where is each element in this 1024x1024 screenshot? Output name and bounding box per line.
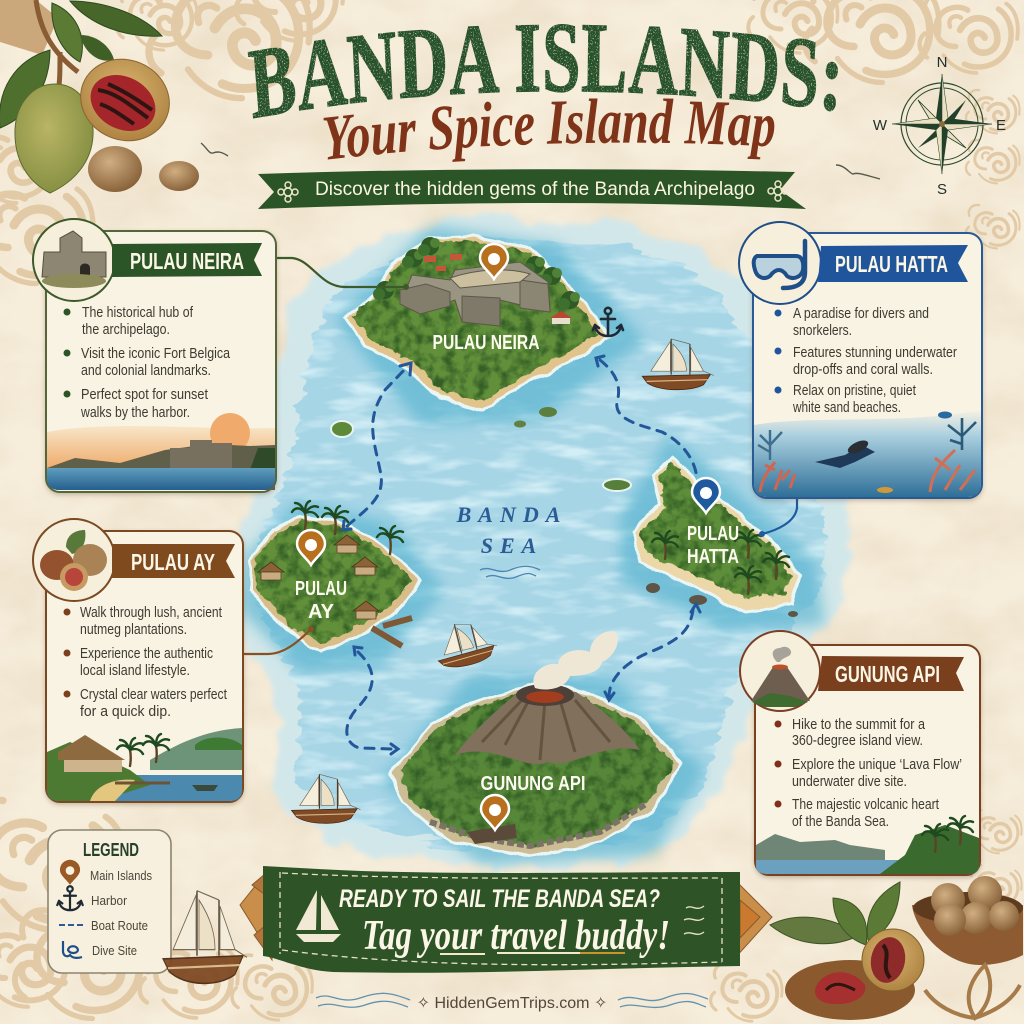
panel scene: mountains and jungle (756, 816, 979, 874)
panel bullets: Hike to the summit for a (792, 717, 926, 733)
panel bullets: walks by the harbor. (80, 405, 190, 421)
pin: Hatta (692, 478, 720, 513)
illustration: nutmeg branch top-left (0, 0, 199, 193)
map label: Banda Sea (456, 502, 567, 578)
decorative sailing ships on the sea (292, 339, 714, 823)
panel bullets (774, 306, 957, 416)
footer website (316, 993, 708, 1012)
map labels: island names: PULAU (295, 578, 347, 600)
panel bullets: local island lifestyle. (80, 663, 190, 679)
map labels: island names: HATTA (687, 546, 739, 568)
compass rose: W (873, 117, 888, 134)
connector lines from panels to islands (243, 258, 797, 654)
panel icon: dive mask and snorkel (739, 222, 821, 304)
panel scene: sunset fort (47, 413, 275, 490)
decorative seagulls (201, 143, 880, 179)
legend: Main Islands (90, 868, 152, 883)
panel bullets: Crystal clear waters perfect (80, 687, 227, 703)
footer website: ✧ HiddenGemTrips.com ✧ (417, 995, 607, 1012)
call-to-action banner: READY TO SAIL THE BANDA SEA? (339, 885, 660, 913)
panel bullets (64, 605, 227, 720)
panel icon: nutmegs (33, 519, 115, 601)
panel bullets: for a quick dip. (80, 704, 171, 720)
panel bullets (64, 305, 231, 421)
panel bullets: Explore the unique ‘Lava Flow’ (792, 757, 962, 773)
small islets (331, 407, 798, 617)
panel bullets: Features stunning underwater (793, 345, 957, 361)
panel bullets: Perfect spot for sunset (81, 387, 208, 403)
open nutmeg fruit with mace (68, 46, 182, 154)
woven pattern ends (240, 868, 772, 960)
panel bullets: Walk through lush, ancient (80, 605, 222, 621)
panel bullets: The majestic volcanic heart (792, 797, 939, 813)
boat routes (347, 360, 697, 749)
legend (48, 830, 171, 973)
map labels: island names (295, 332, 739, 795)
title: BANDA ISLANDS: (248, 24, 838, 118)
map: Banda Sea water (235, 220, 851, 866)
compass rose: E (996, 117, 1006, 134)
panel icon: volcano (740, 631, 820, 711)
volcanic smoke plume (533, 631, 618, 690)
panel heading: Pulau Neira (112, 243, 262, 277)
map labels: island names: GUNUNG API (480, 773, 586, 795)
illustration: tall ship beside the legend (163, 891, 247, 983)
map labels: island names: PULAU (687, 523, 739, 545)
panel bullets: nutmeg plantations. (80, 622, 187, 638)
panel bullets: of the Banda Sea. (792, 814, 889, 830)
panel heading: Pulau Ay (112, 544, 235, 578)
panel bullets: 360-degree island view. (792, 733, 923, 749)
map labels: island names: PULAU NEIRA (432, 332, 540, 354)
tagline ribbon: Discover the hidden gems of the Banda Archipelago (315, 179, 755, 200)
panel heading: Gunung Api (818, 656, 964, 691)
island: Pulau Neira (345, 236, 610, 410)
panel heading: Pulau Hatta (818, 245, 968, 282)
panel bullets: The historical hub of (82, 305, 194, 321)
legend: Harbor (91, 893, 128, 908)
panel bullets: and colonial landmarks. (81, 363, 211, 379)
nutmeg seeds (88, 146, 142, 192)
map labels: island names: AY (308, 601, 335, 623)
map label: Banda Sea: BANDA (456, 502, 567, 527)
route arrowheads (343, 356, 700, 754)
map label: Banda Sea: SEA (481, 533, 543, 558)
panel bullets: drop-offs and coral walls. (793, 362, 933, 378)
pin: Neira (480, 244, 508, 279)
pin: Gunung Api (467, 795, 517, 844)
panel: Pulau Ay (33, 519, 243, 802)
panel bullets: underwater dive site. (792, 774, 907, 790)
panel heading: Pulau Neira: PULAU NEIRA (130, 248, 244, 274)
panel heading: Pulau Ay: PULAU AY (131, 549, 215, 575)
island: Pulau Hatta (632, 456, 800, 612)
panel bullets: snorkelers. (793, 323, 852, 339)
compass rose: N (937, 54, 947, 71)
panel bullets: the archipelago. (82, 322, 170, 338)
Fort Belgica (400, 262, 550, 326)
banner icon: sailboat (296, 890, 341, 942)
legend: LEGEND (83, 840, 139, 860)
compass rose (873, 54, 1006, 198)
panel scene: divers and coral reef (754, 410, 981, 497)
subtitle: Your Spice Island Map (324, 98, 774, 162)
illustration: nutmeg bowl bottom-right (770, 876, 1023, 1020)
compass rose: S (937, 181, 947, 198)
tagline ribbon (258, 169, 806, 209)
panel icon: fort (33, 219, 115, 301)
panel bullets: Experience the authentic (80, 646, 213, 662)
green nutmeg fruit (15, 84, 93, 193)
map label: anchor harbor (593, 308, 623, 336)
panel heading: Gunung Api: GUNUNG API (835, 661, 940, 687)
call-to-action banner (240, 866, 772, 973)
legend: Dive Site (92, 943, 137, 958)
panel bullets: white sand beaches. (792, 400, 901, 416)
island: Gunung Api volcano (392, 631, 682, 856)
pin: Ay (297, 530, 325, 565)
legend: Boat Route (91, 918, 148, 933)
panel: Pulau Hatta (739, 222, 982, 498)
panel: Pulau Neira (33, 219, 276, 492)
panel: Gunung Api (740, 631, 980, 875)
panel bullets: A paradise for divers and (793, 306, 929, 322)
panel bullets: Visit the iconic Fort Belgica (81, 346, 231, 362)
panel heading: Pulau Hatta: PULAU HATTA (835, 251, 948, 277)
panel bullets (774, 717, 962, 830)
panel bullets: Relax on pristine, quiet (793, 383, 916, 399)
panel scene: plantation house by the water (47, 728, 242, 801)
call-to-action banner: Tag your travel buddy! (362, 913, 670, 959)
island: Pulau Ay (250, 501, 420, 652)
